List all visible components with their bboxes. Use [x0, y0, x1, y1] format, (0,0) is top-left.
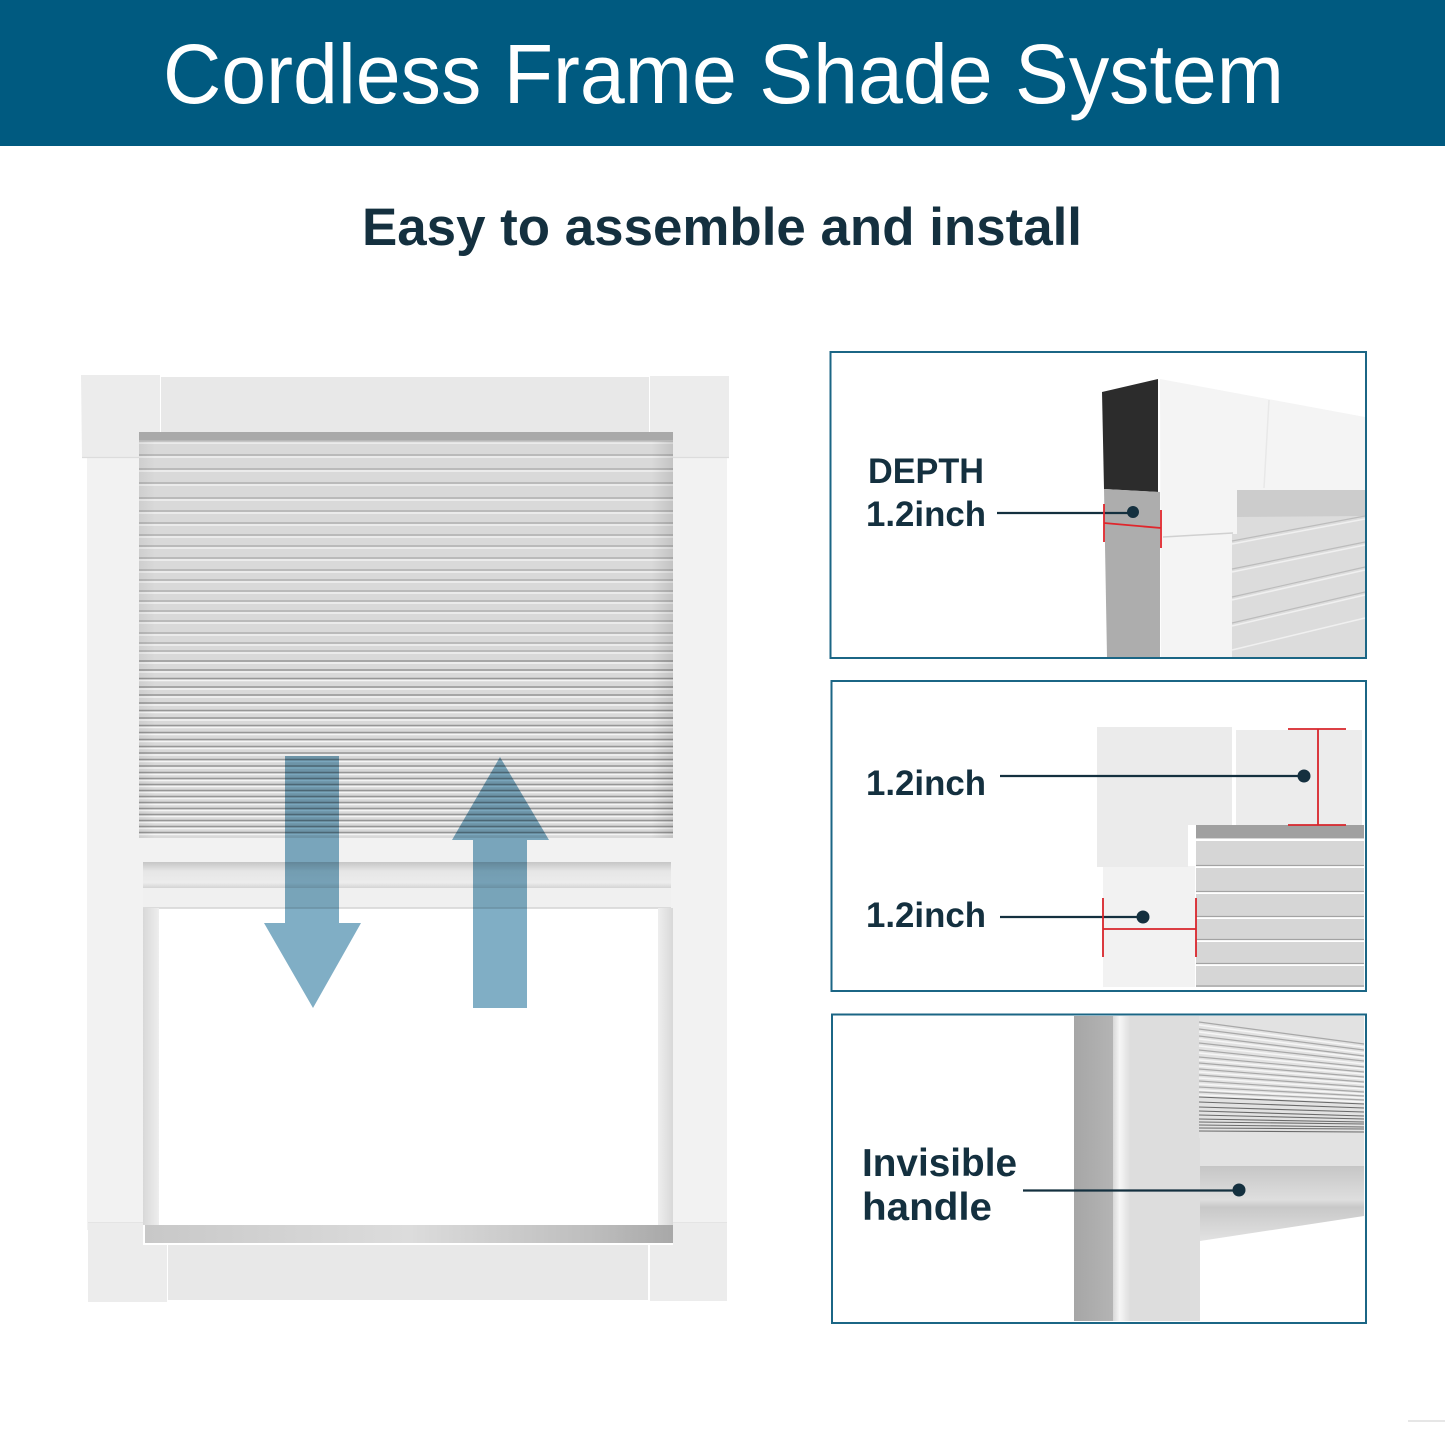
shade close-up [1232, 490, 1365, 657]
panel: depth detail [830, 352, 1366, 658]
label: upper size: 1.2inch [866, 764, 986, 803]
upper leader line and dot [1000, 770, 1310, 782]
frame side faces [1102, 379, 1160, 657]
red dimension mark [1104, 504, 1161, 548]
frame side stiles [87, 450, 727, 1230]
arrow: up [452, 757, 549, 1008]
panel: invisible handle detail [832, 1014, 1366, 1323]
window shade frame illustration [81, 375, 729, 1302]
side channels [143, 908, 673, 1225]
arrow: down [264, 756, 361, 1008]
frame corner blocks [1097, 727, 1362, 987]
shade close-up [1196, 825, 1364, 987]
label: depth: 1.2inch [866, 495, 986, 534]
invisible handle bar [143, 838, 671, 908]
label: invisible handle: handle [862, 1186, 992, 1229]
label: invisible handle: Invisible [862, 1142, 1017, 1185]
red dimension mark: height [1288, 729, 1346, 825]
subtitle: Easy to assemble and install [362, 198, 1082, 257]
shade close-up [1199, 1016, 1364, 1138]
label: invisible handle [862, 1142, 1017, 1229]
label: depth [866, 452, 986, 534]
header banner [0, 0, 1445, 146]
title: Cordless Frame Shade System [163, 27, 1284, 121]
handle bar close-up [1200, 1138, 1364, 1241]
top rail and corners [81, 375, 729, 1223]
red dimension mark: width [1103, 898, 1196, 957]
bottom sill [145, 1225, 673, 1243]
bottom rail and corners [88, 1223, 727, 1302]
label: depth: DEPTH [868, 452, 984, 491]
frame profile [1074, 1016, 1200, 1321]
leader line and dot [997, 506, 1139, 518]
frame front face [1160, 379, 1365, 657]
lower leader line and dot [1000, 910, 1150, 924]
leader line and dot [1023, 1184, 1246, 1196]
panel: width detail [832, 681, 1366, 991]
pleated cellular shade [139, 432, 673, 838]
label: lower size: 1.2inch [866, 896, 986, 935]
